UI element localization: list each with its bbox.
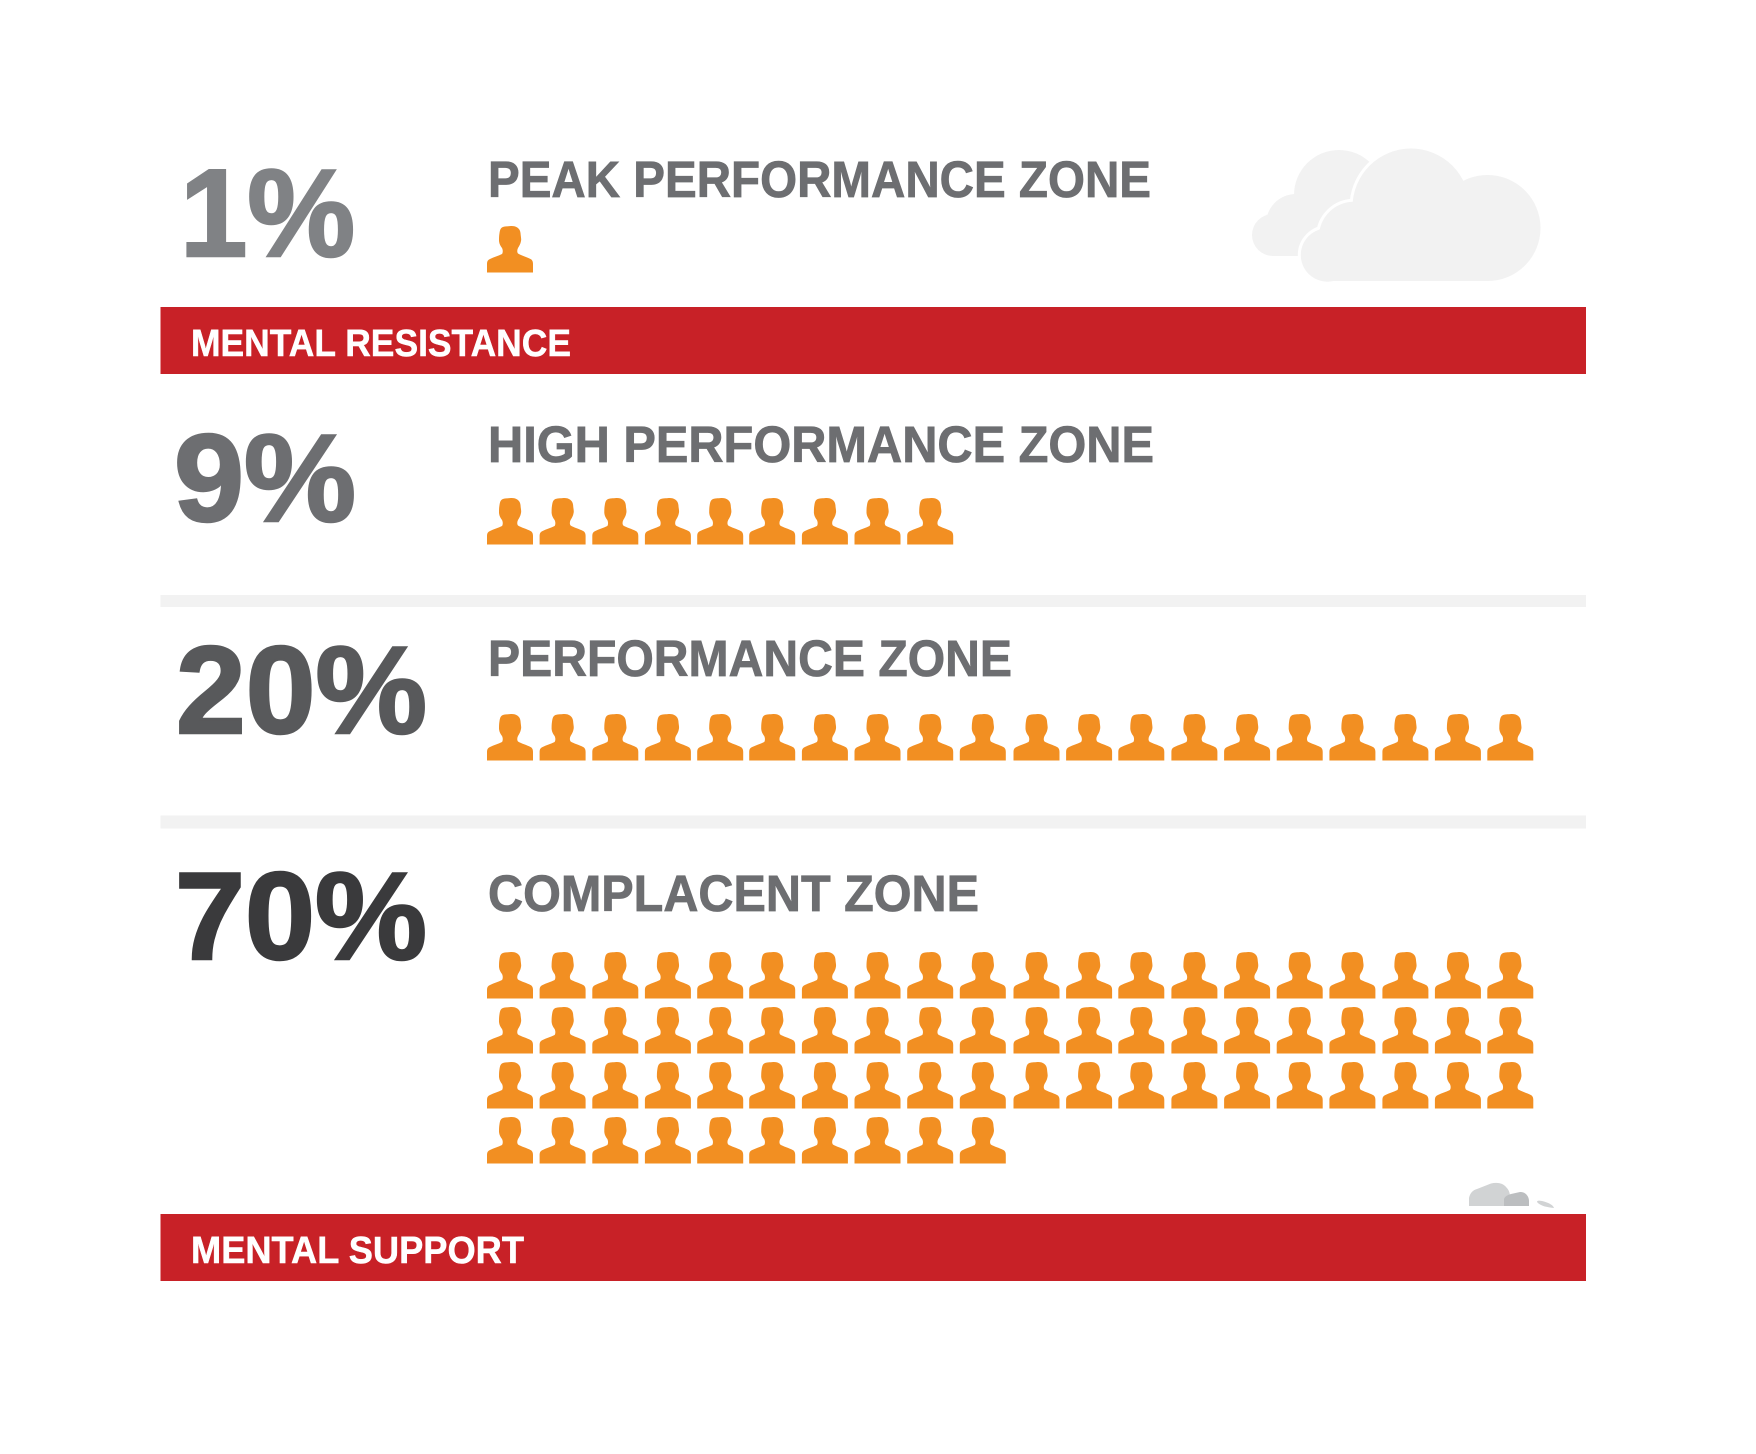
heading: high performance zone: HIGH PERFORMANCE ZONE [488, 416, 1154, 473]
banner: mental resistance: MENTAL RESISTANCE [191, 323, 571, 365]
stat: 20%: 20% [176, 622, 427, 760]
heading: complacent zone: COMPLACENT ZONE [488, 865, 979, 922]
icons: 9 people [487, 498, 953, 544]
banner: mental support: MENTAL SUPPORT [191, 1230, 524, 1272]
banner: mental support [160, 1214, 1586, 1281]
icon: clouds [1252, 148, 1540, 282]
stat: 9%: 9% [174, 410, 356, 548]
stat: 1%: 1% [180, 145, 355, 283]
heading: peak performance zone: PEAK PERFORMANCE ZONE [488, 151, 1151, 208]
stat: 70%: 70% [175, 848, 427, 986]
banner: mental resistance [160, 307, 1586, 374]
icon: rocks [1469, 1183, 1554, 1208]
icon: 1 person [487, 226, 533, 272]
icons: 70 people [487, 952, 1533, 1164]
icons: 20 people [487, 714, 1533, 760]
heading: performance zone: PERFORMANCE ZONE [488, 630, 1012, 687]
